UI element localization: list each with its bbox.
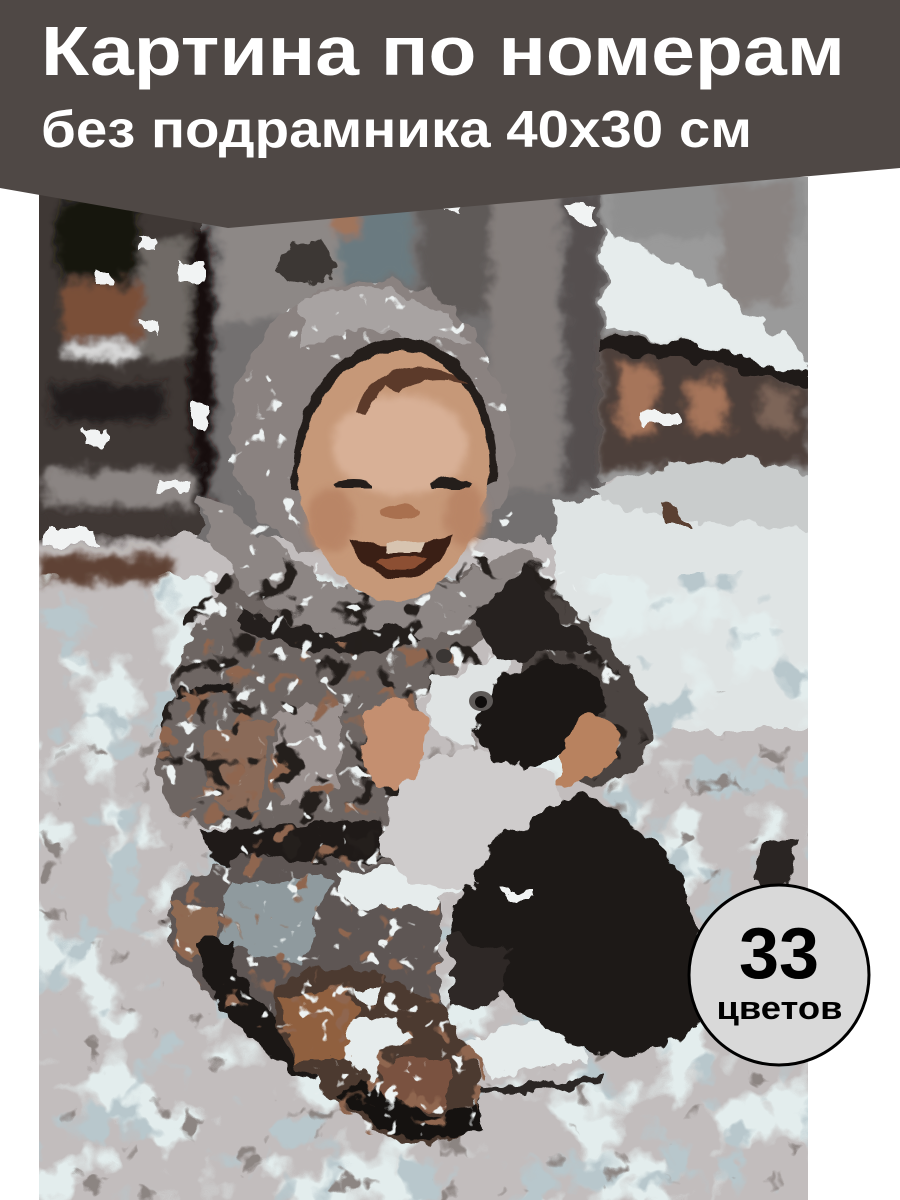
snowy roof [603, 228, 810, 378]
hat [232, 243, 514, 550]
title line 1: Картина по номерам [41, 12, 845, 90]
hands [361, 701, 620, 788]
ground snow patches [20, 575, 830, 1200]
coat body [158, 499, 652, 870]
badge: 33 colours: цветов [716, 990, 842, 1026]
hut shadow line [600, 335, 810, 388]
snow drift right [590, 460, 820, 530]
badge: 33 colours [689, 885, 869, 1065]
left building [39, 200, 212, 583]
dark line on snow [480, 1076, 600, 1096]
flecks and colour on legs [172, 853, 486, 1136]
cat head and chest [380, 565, 604, 890]
snow flecks and tones on clothing [150, 270, 660, 870]
badge: 33 colours: 33 [739, 914, 819, 994]
title line 2: без подрамника 40х30 см [41, 101, 752, 159]
boot snow [335, 865, 585, 1085]
hat edge around face [292, 338, 497, 490]
eyes [333, 480, 372, 488]
nose shadow [380, 504, 420, 520]
mouth [350, 535, 452, 578]
header banner [0, 0, 900, 228]
wooden hut [600, 335, 810, 470]
legs [168, 855, 440, 1080]
painting: child with cat in snow [20, 160, 830, 1200]
cat body [450, 795, 798, 1053]
loose snow flecks [45, 200, 680, 900]
cat eye [436, 649, 493, 711]
painting background [20, 160, 830, 1200]
coat dark folds [170, 610, 420, 865]
face [292, 338, 497, 602]
boot [274, 969, 485, 1142]
fence and wall [220, 177, 808, 490]
hair [355, 367, 470, 415]
